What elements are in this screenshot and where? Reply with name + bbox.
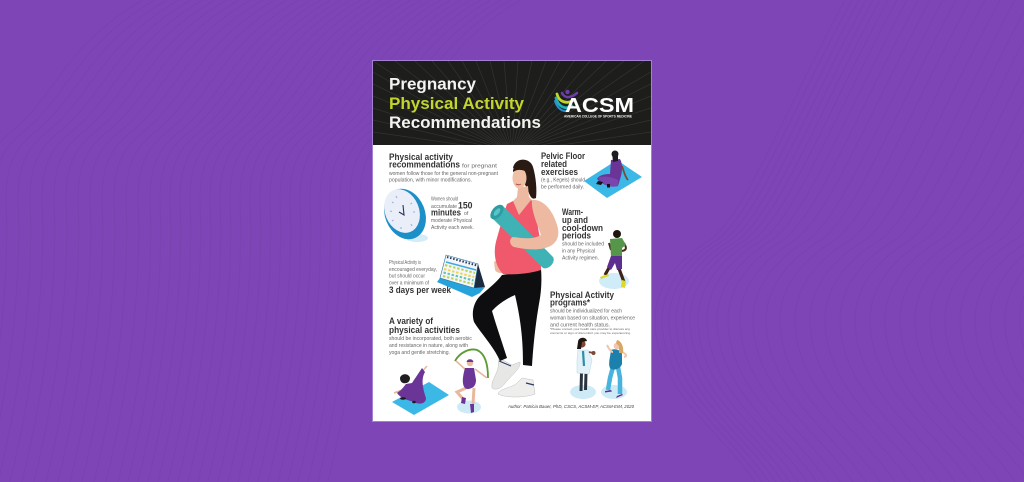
- text block: 3 days per week: 3 days per week: [389, 285, 452, 296]
- title: Recommendations: [389, 113, 541, 132]
- text block: 3 days per week: encouraged everyday,: [389, 267, 437, 273]
- arm holding mat: [510, 200, 558, 249]
- text block: programs: concerns or sign of discomfort you may be experiencing.: [550, 331, 631, 335]
- author credit: Author: Patricia Bauer, PhD, CSCS, ACSM-EP, ACSM-EIM, 2020: [507, 404, 634, 410]
- top: [495, 200, 541, 274]
- text block: physical activity recommendations: [389, 152, 499, 184]
- text block: 3 days per week: [389, 260, 452, 296]
- hand on belly: [494, 260, 511, 273]
- text block: programs: [550, 290, 635, 335]
- text block: 3 days per week: Physical Activity is: [389, 260, 421, 266]
- text block: programs: programs*: [550, 298, 590, 308]
- leggings: [473, 269, 541, 366]
- icon: woman with jump rope: [455, 349, 488, 414]
- illustration: pregnant woman with yoga mat: [473, 160, 558, 397]
- icon: doctor: [570, 338, 596, 399]
- text block: pelvic floor: related: [541, 159, 567, 170]
- text block: warm-up: [562, 207, 604, 262]
- text block: 150 minutes: [431, 196, 474, 231]
- icon: man warming up: [599, 230, 629, 289]
- text block: 150 minutes: of: [464, 211, 469, 217]
- hair: [513, 160, 536, 199]
- icon: woman sitting on mat: [584, 150, 642, 198]
- panel: infographic card: [372, 60, 652, 422]
- text block: programs: and current health status.: [550, 322, 610, 328]
- text block: pelvic floor: (e.g., Kegels) should: [541, 178, 585, 184]
- yoga mat: [488, 202, 554, 268]
- text block: physical activity recommendations: women follow those for the general non-pregnant: [389, 171, 499, 177]
- icon: wall clock: [377, 182, 433, 246]
- text block: variety of activities: and resistance in nature, along with: [389, 343, 468, 349]
- title: Physical Activity: [389, 94, 525, 113]
- logo: ACSM: AMERICAN COLLEGE OF SPORTS MEDICINE: [564, 114, 633, 118]
- text block: programs: should be individualized for each: [550, 308, 622, 314]
- text block: warm-up: in any Physical: [562, 248, 595, 254]
- text block: programs: *Please contact your health care provider to discuss any: [550, 327, 631, 331]
- text block: physical activity recommendations: population, with minor modifications.: [389, 178, 472, 184]
- icon: desk calendar: [437, 255, 485, 297]
- text block: warm-up: cool-down: [562, 223, 603, 234]
- text block: warm-up: should be included: [562, 242, 604, 248]
- text block: pelvic floor: [541, 151, 585, 190]
- text block: variety of activities: A variety of: [389, 316, 434, 327]
- text block: 150 minutes: accumulate: [431, 204, 457, 210]
- icon: patient: [601, 340, 627, 399]
- panel: header band: [373, 61, 651, 152]
- text block: physical activity recommendations: Physical activity: [389, 152, 454, 163]
- text block: pelvic floor: exercises: [541, 167, 578, 178]
- icon: swoosh figure: [555, 90, 577, 111]
- text block: warm-up: Warm-: [562, 207, 583, 218]
- title: Pregnancy: [389, 74, 477, 94]
- icon: woman doing yoga on mat: [392, 366, 449, 415]
- text block: warm-up: up and: [562, 215, 588, 226]
- shoes: [492, 358, 535, 397]
- text block: 150 minutes: minutes: [431, 208, 461, 218]
- logo: ACSM: ACSM: [565, 95, 634, 117]
- text block: 150 minutes: Women should: [431, 196, 458, 202]
- text block: physical activity recommendations: recommendations: [389, 160, 460, 170]
- text block: 3 days per week: over a minimum of: [389, 280, 430, 286]
- text block: variety of activities: should be incorporated, both aerobic: [389, 336, 472, 342]
- infographic canvas: [372, 60, 652, 422]
- text block: 150 minutes: 150: [458, 200, 472, 212]
- face: [512, 168, 526, 188]
- text block: warm-up: periods: [562, 230, 591, 242]
- text block: physical activity recommendations: for pregnant: [462, 164, 498, 170]
- text block: 150 minutes: moderate Physical: [431, 218, 472, 224]
- logo: ACSM: [555, 90, 634, 118]
- text block: warm-up: Activity regimen.: [562, 256, 599, 262]
- text block: variety of activities: [389, 316, 472, 356]
- text block: pelvic floor: Pelvic Floor: [541, 151, 585, 162]
- text block: variety of activities: physical activities: [389, 325, 460, 336]
- text block: 3 days per week: but should occur: [389, 274, 425, 280]
- text block: variety of activities: yoga and gentle stretching.: [389, 350, 450, 356]
- title: [389, 74, 541, 132]
- text block: pelvic floor: be performed daily.: [541, 184, 584, 190]
- text block: programs: Physical Activity: [550, 290, 615, 301]
- neck and chest: [510, 186, 534, 218]
- text block: 150 minutes: Activity each week.: [431, 225, 474, 231]
- text block: programs: woman based on situation, experience: [550, 316, 635, 322]
